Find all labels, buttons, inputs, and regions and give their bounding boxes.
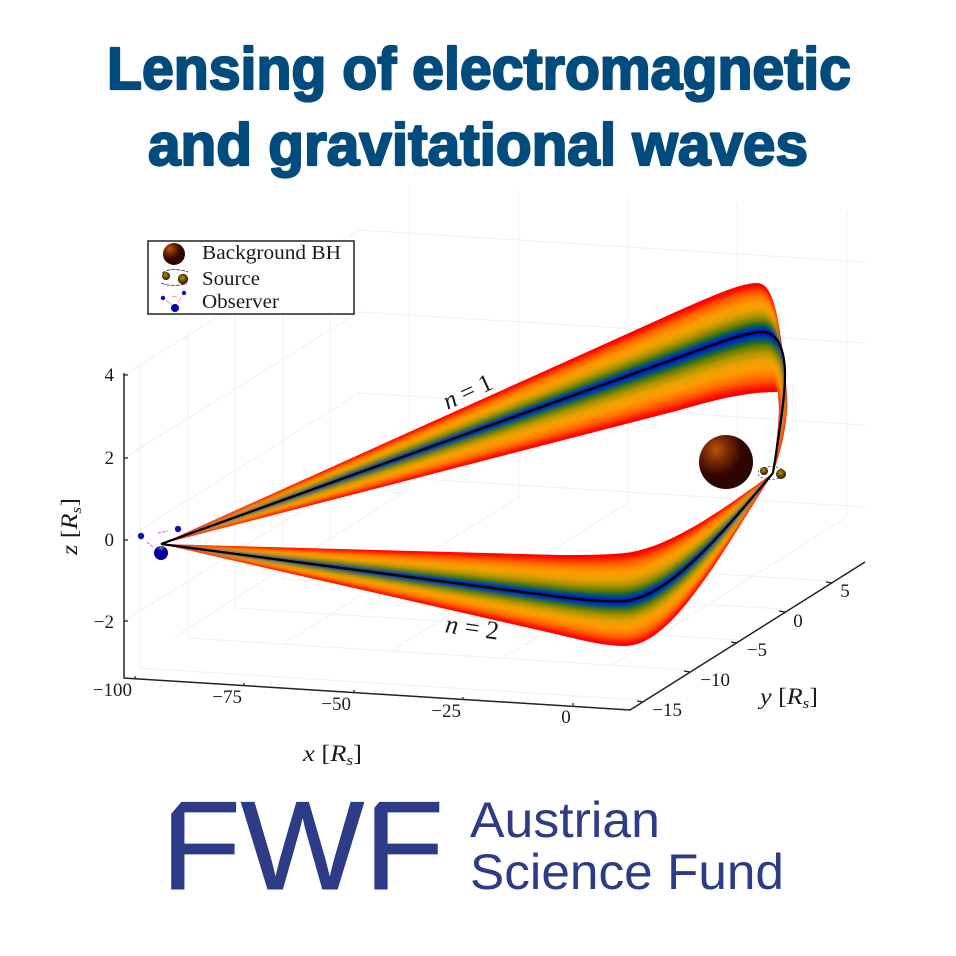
logo wordmark: FWF: [161, 775, 444, 916]
label n=1: n = 1: [439, 369, 497, 415]
y axis label: y [R: [760, 684, 801, 709]
logo text: Science Fund: Science Fund: [470, 844, 784, 900]
label n=2: n = 2: [444, 609, 501, 646]
FWF logo: [161, 775, 784, 916]
logo text: Austrian: Austrian: [470, 792, 660, 848]
axis tick labels: 0: [104, 530, 114, 551]
axis tick labels: −100: [93, 680, 132, 701]
axis tick labels: −75: [212, 687, 242, 708]
ray band n=2: [161, 473, 773, 646]
axis tick labels: 4: [104, 365, 114, 386]
legend label: background BH: Background BH: [202, 242, 341, 264]
infographic canvas: [60, 44, 866, 890]
background black hole sphere: [699, 435, 753, 489]
source binary: [758, 466, 786, 480]
axis tick labels: [93, 365, 850, 728]
z axis label: z [R: [57, 515, 82, 555]
y axis label: s: [803, 696, 809, 712]
axis tick labels: −25: [431, 701, 461, 722]
legend label: observer: Observer: [202, 291, 279, 313]
x axis label: s: [346, 753, 353, 769]
legend icon: background BH: [163, 243, 185, 265]
axis tick labels: −5: [747, 640, 767, 661]
axes: [124, 373, 865, 710]
axis tick labels: 0: [561, 707, 571, 728]
axis tick labels: −2: [94, 612, 114, 633]
grid lines: [124, 184, 865, 700]
legend: [148, 241, 354, 314]
observer constellation: [138, 526, 181, 560]
title: [107, 36, 851, 178]
axis tick labels: −10: [700, 670, 730, 691]
legend label: source: Source: [202, 268, 260, 290]
x axis label: x [R: [303, 741, 344, 766]
axis tick labels: −15: [652, 700, 682, 721]
axis tick labels: 2: [104, 448, 114, 469]
y axis label: ]: [809, 684, 818, 709]
axis tick labels: 0: [793, 611, 803, 632]
ray band n=1: [161, 283, 787, 544]
3D plot: [57, 184, 865, 769]
legend icon: source: [161, 270, 188, 285]
axis tick labels: 5: [840, 581, 850, 602]
title: and gravitational waves: [148, 112, 808, 178]
z axis label: ]: [57, 498, 82, 507]
x axis label: ]: [353, 741, 362, 766]
z axis label: s: [69, 507, 85, 513]
title: Lensing of electromagnetic: [107, 36, 851, 102]
axis tick labels: −50: [321, 694, 351, 715]
legend icon: observer: [161, 291, 186, 312]
